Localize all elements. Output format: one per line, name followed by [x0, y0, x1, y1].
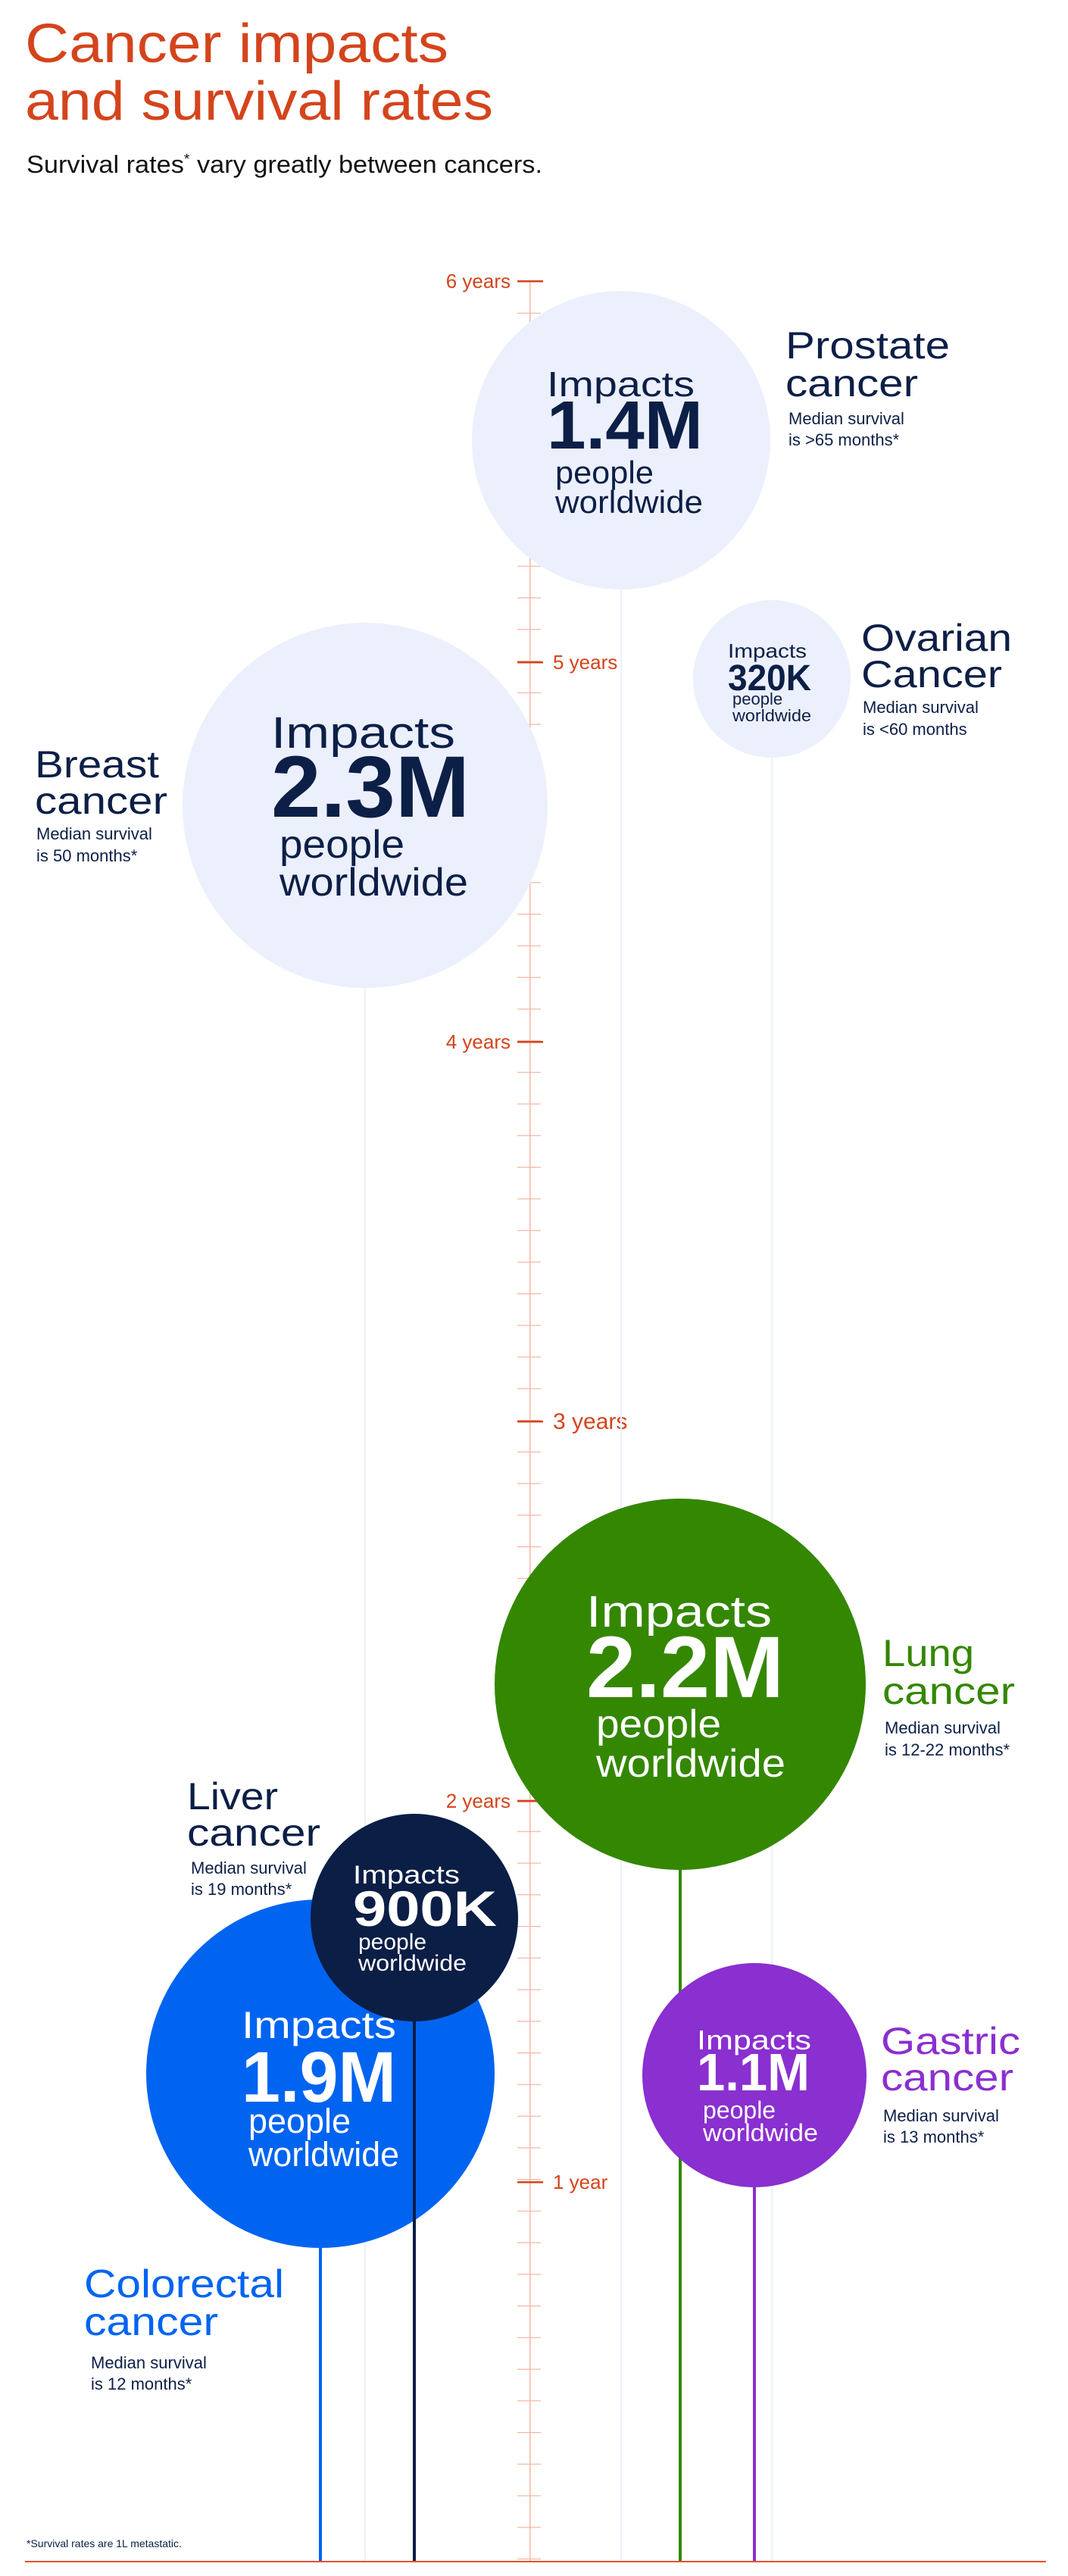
- panel: liver: Liver: [187, 1775, 278, 1818]
- panel: prostate: 1.4M: [547, 388, 703, 464]
- axis: years: 5 years: [553, 651, 617, 674]
- panel: prostate: is >65 months*: [789, 430, 900, 449]
- panel: liver: worldwide: [358, 1951, 467, 1976]
- panel: prostate: cancer: [785, 362, 918, 405]
- panel: lung: Median survival: [885, 1718, 1001, 1737]
- panel: gastric: cancer: [881, 2056, 1013, 2099]
- panel: breast: 2.3M: [271, 739, 470, 836]
- panel: ovarian: worldwide: [732, 706, 811, 725]
- panel: prostate: worldwide: [554, 484, 703, 520]
- panel: colorectal: worldwide: [248, 2135, 399, 2174]
- panel: liver: 900K: [353, 1880, 497, 1937]
- panel: lung: [495, 1499, 1015, 1870]
- panel: lung: is 12-22 months*: [885, 1740, 1010, 1759]
- panel: colorectal: Impacts: [242, 2004, 396, 2046]
- panel: prostate: people: [555, 455, 654, 490]
- axis: years: 6 years: [446, 270, 511, 292]
- panel: ovarian: Ovarian: [861, 617, 1012, 659]
- panel: gastric: Impacts: [697, 2024, 811, 2055]
- panel: gastric: is 13 months*: [883, 2127, 985, 2146]
- panel: gastric: people: [703, 2096, 776, 2124]
- panel: liver: Impacts: [353, 1861, 460, 1890]
- panel: colorectal: Median survival: [91, 2353, 207, 2372]
- panel: breast: Breast: [35, 743, 159, 786]
- panel: lung: Lung: [882, 1632, 974, 1674]
- panel: colorectal: people: [248, 2102, 351, 2140]
- panel: prostate: [472, 291, 950, 589]
- panel: breast: Impacts: [271, 708, 455, 758]
- panel: ovarian: people: [732, 689, 782, 708]
- panel: liver: Median survival: [191, 1859, 307, 1877]
- panel: lung: cancer: [882, 1670, 1015, 1712]
- baseline: [25, 2561, 1046, 2562]
- panel: ovarian: Cancer: [861, 653, 1002, 696]
- panel: prostate: Median survival: [789, 409, 904, 428]
- panel: ovarian: 320K: [728, 658, 811, 699]
- subtitle: vary greatly between cancers.: [189, 151, 542, 178]
- panel: ovarian: is <60 months: [863, 720, 967, 739]
- panel: ovarian: [693, 600, 1012, 758]
- panel: liver: [187, 1775, 518, 2561]
- title: [25, 14, 493, 132]
- panel: lung: worldwide: [595, 1742, 785, 1786]
- panel: colorectal: Colorectal: [84, 2262, 284, 2306]
- axis: years: 3 years: [553, 1409, 627, 1434]
- panel: prostate: Impacts: [547, 364, 695, 404]
- panel: breast: [35, 623, 548, 988]
- panel: breast: worldwide: [279, 861, 468, 905]
- panel: breast: is 50 months*: [36, 846, 138, 865]
- title: and survival rates: [25, 71, 493, 132]
- panel: colorectal: is 12 months*: [91, 2374, 192, 2393]
- panel: breast: cancer: [35, 780, 167, 822]
- subtitle: Survival rates: [27, 151, 173, 178]
- subtitle: *: [184, 152, 189, 167]
- panel: lung: people: [596, 1702, 721, 1746]
- panel: ovarian: Impacts: [728, 639, 807, 662]
- panel: lung: 2.2M: [586, 1619, 784, 1716]
- axis: years: 2 years: [446, 1790, 511, 1812]
- panel: liver: cancer: [187, 1812, 320, 1854]
- panel: gastric: worldwide: [702, 2119, 818, 2146]
- panel: colorectal: 1.9M: [242, 2037, 396, 2118]
- panel: liver: people: [358, 1930, 426, 1955]
- panel: lung: Impacts: [586, 1587, 772, 1637]
- axis: years: 1 year: [553, 2171, 608, 2193]
- axis: years: [446, 270, 627, 2562]
- panel: colorectal: cancer: [84, 2300, 218, 2344]
- panel: breast: people: [279, 823, 404, 867]
- panel: ovarian: Median survival: [863, 698, 979, 717]
- panel: liver: is 19 months*: [191, 1880, 292, 1899]
- panel: gastric: 1.1M: [697, 2043, 810, 2102]
- panel: colorectal: [84, 1899, 495, 2393]
- panel: prostate: Prostate: [785, 324, 950, 367]
- footnote: *Survival rates are 1L metastatic.: [27, 2537, 182, 2549]
- panel: gastric: Gastric: [881, 2020, 1020, 2062]
- panel: gastric: Median survival: [883, 2106, 999, 2125]
- panel: gastric: [642, 1963, 1020, 2187]
- title: Cancer impacts: [25, 14, 448, 74]
- panel: breast: Median survival: [36, 824, 152, 843]
- stems: [319, 583, 773, 2561]
- axis: years: 4 years: [446, 1030, 511, 1053]
